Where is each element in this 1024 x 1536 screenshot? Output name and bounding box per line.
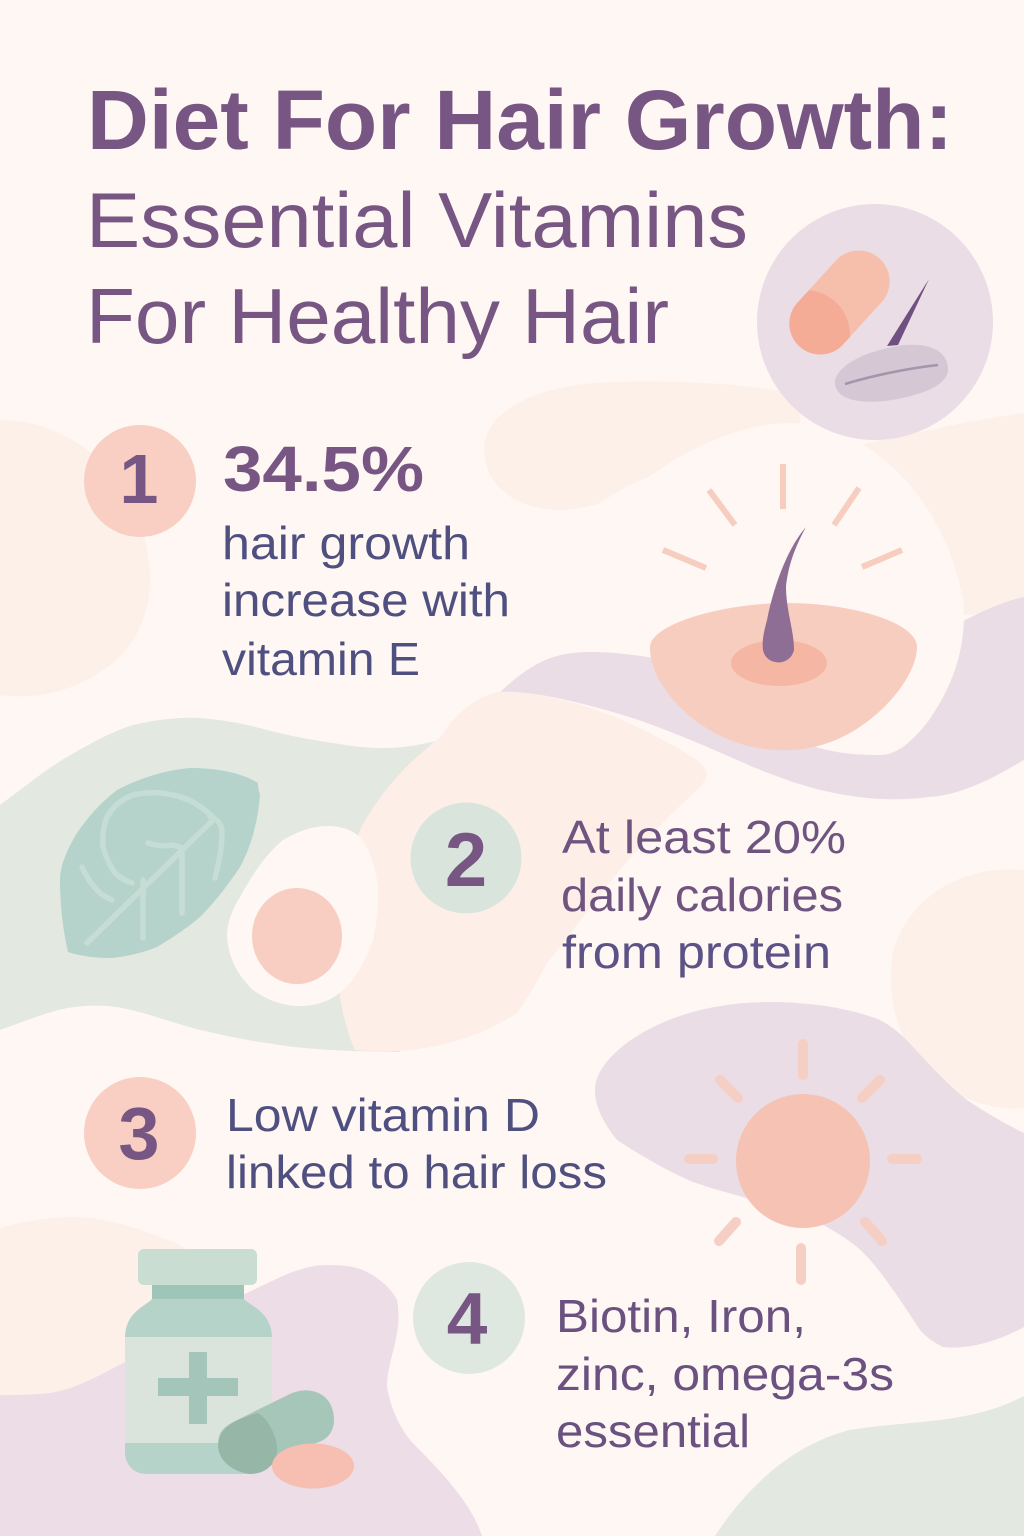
step 4 text: zinc, omega-3s [556,1348,894,1400]
title: For Healthy Hair [86,272,669,360]
step 4 badge: 4 [447,1279,488,1360]
step 2 badge: 2 [445,818,487,903]
background wave: peach [340,692,707,1051]
icon: sun [689,1044,917,1280]
title [86,73,953,360]
step 3 badge: 3 [118,1092,160,1175]
background blob: lilac lower left [0,1265,482,1536]
icon: egg [227,826,378,1006]
icon: supplement bottle [125,1249,354,1488]
step 1 text: 34.5% [223,433,424,505]
step 4 text: Biotin, Iron, [556,1290,806,1342]
step 1 text: increase with [222,574,510,626]
step 2 text: daily calories [561,869,843,921]
background wave: lilac [500,597,1024,799]
step 1 text: hair growth [222,517,470,569]
step 2 text: from protein [562,926,831,978]
background blob: lilac right [595,1002,1024,1348]
step 4 text [556,1290,894,1457]
step 1 badge [84,425,196,537]
step 1 text [222,433,510,685]
step 3 badge [84,1077,196,1189]
step 2 text [561,811,846,978]
step 3 text: linked to hair loss [226,1146,607,1198]
background blob: green bottom right [715,1396,1024,1536]
step 3 text: Low vitamin D [226,1089,540,1141]
step 1 text: vitamin E [222,633,420,685]
background wave: green [0,718,470,1052]
step 2 text: At least 20% [562,811,846,863]
step 4 text: essential [556,1405,750,1457]
step 1 badge: 1 [120,440,158,518]
icon: leaf [60,768,260,958]
title: Diet For Hair Growth: [87,73,953,167]
step 4 badge [413,1262,525,1374]
step 3 text [226,1089,607,1198]
icon: capsule and tablet [757,204,993,440]
background blob: follicle highlight [600,423,964,755]
icon: hair follicle [650,464,917,750]
step 2 badge [410,802,522,914]
title: Essential Vitamins [86,176,748,264]
